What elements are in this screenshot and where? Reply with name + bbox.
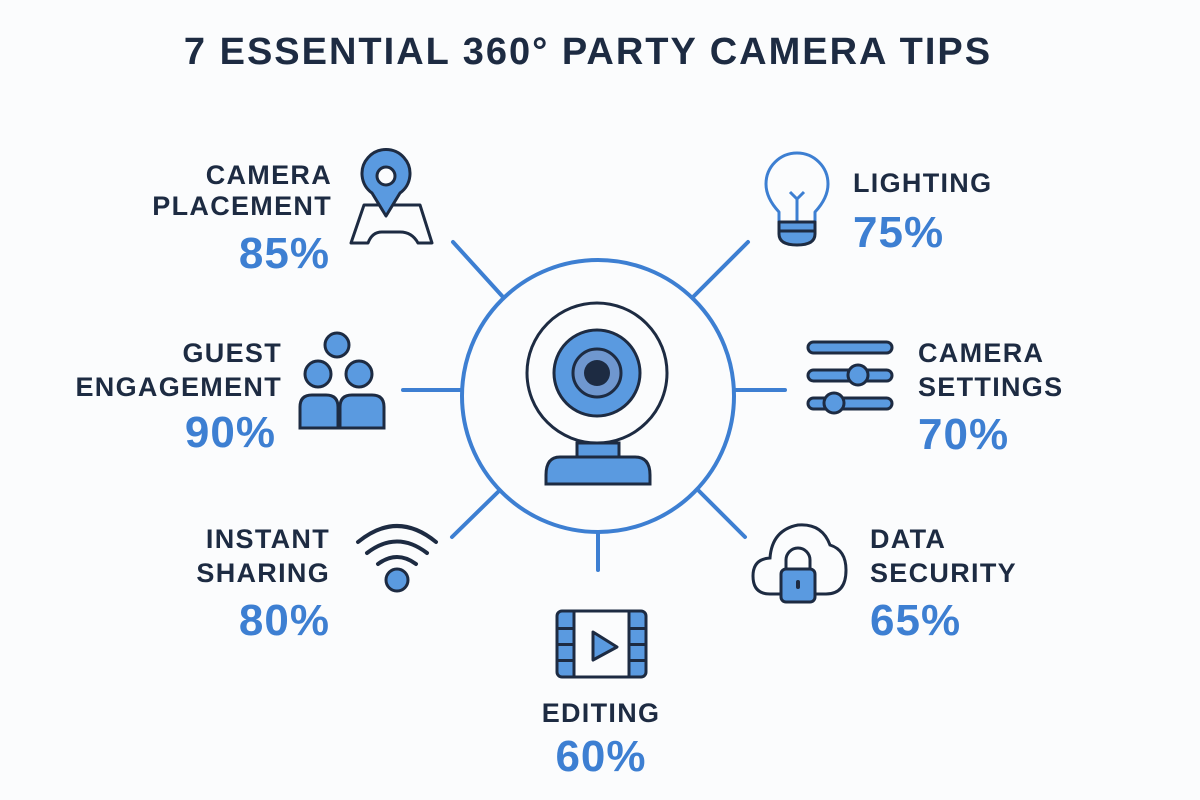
item: lighting: LIGHTING (853, 168, 992, 198)
item: data security: DATA (870, 524, 946, 554)
item: camera placement: 85% (239, 229, 330, 278)
item: guest engagement: GUEST (182, 338, 282, 368)
item: editing (542, 611, 660, 781)
icon: light bulb (766, 153, 828, 245)
spokes (403, 242, 785, 570)
icon: cloud lock (753, 525, 846, 602)
icon: map pin (351, 150, 432, 243)
item: lighting (766, 153, 992, 257)
item: guest engagement (75, 333, 384, 457)
icon: people (300, 333, 384, 428)
item: data security: SECURITY (870, 558, 1017, 588)
item: data security (753, 524, 1017, 645)
title: 7 ESSENTIAL 360° PARTY CAMERA TIPS (184, 31, 992, 73)
item: camera placement: CAMERA (206, 160, 332, 190)
item: data security: 65% (870, 596, 961, 645)
item: editing: 60% (555, 732, 647, 781)
item: instant sharing: SHARING (196, 558, 330, 588)
item: instant sharing: INSTANT (206, 524, 330, 554)
item: editing: EDITING (542, 698, 660, 728)
item: guest engagement: 90% (185, 408, 276, 457)
icon: wifi (358, 526, 436, 591)
icon: sliders (808, 342, 892, 413)
item: instant sharing (196, 524, 436, 645)
item: lighting: 75% (853, 208, 944, 257)
item: camera settings: SETTINGS (918, 372, 1063, 402)
item: camera placement: PLACEMENT (152, 191, 332, 221)
item: camera settings: CAMERA (918, 338, 1044, 368)
central circle with webcam (462, 260, 734, 532)
item: instant sharing: 80% (239, 596, 330, 645)
item: camera settings (808, 338, 1063, 459)
icon: film play (557, 611, 646, 677)
item: camera settings: 70% (918, 410, 1009, 459)
item: camera placement (152, 150, 432, 278)
item: guest engagement: ENGAGEMENT (75, 372, 282, 402)
